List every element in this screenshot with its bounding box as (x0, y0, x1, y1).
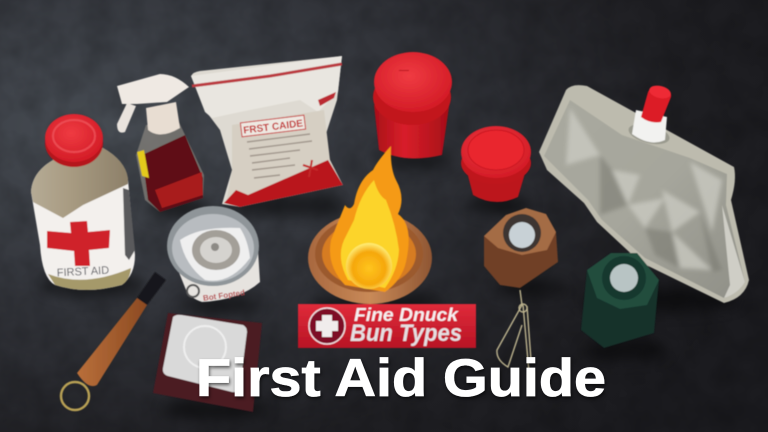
flame (330, 146, 409, 292)
bag label: FRST CAIDE (243, 118, 304, 137)
square box (153, 313, 262, 412)
tin label text: Bot Fopted (202, 288, 246, 303)
small red canister (461, 126, 531, 202)
spray bottle (117, 74, 204, 212)
green hex holder (581, 253, 659, 348)
bar text: Fine Dnuck (354, 305, 459, 325)
fire in copper bowl (308, 146, 432, 304)
brown hex holder (484, 208, 558, 372)
pen with wooden handle (61, 272, 166, 410)
bottle with red cap: first aid (31, 114, 135, 290)
bag: first aid package (191, 56, 343, 207)
glass tin candle (167, 206, 260, 303)
title: First Aid Guide (196, 349, 606, 408)
red snack bar: Bun Types (350, 320, 462, 347)
large red canister (373, 52, 452, 159)
spout (626, 84, 672, 148)
keychain wire (497, 290, 531, 372)
red snack bar (298, 304, 476, 348)
label text: FIRST AID (57, 265, 110, 279)
pouch: silver foil with red spout (539, 84, 749, 303)
red cross (47, 221, 110, 266)
object shadows (42, 150, 740, 420)
